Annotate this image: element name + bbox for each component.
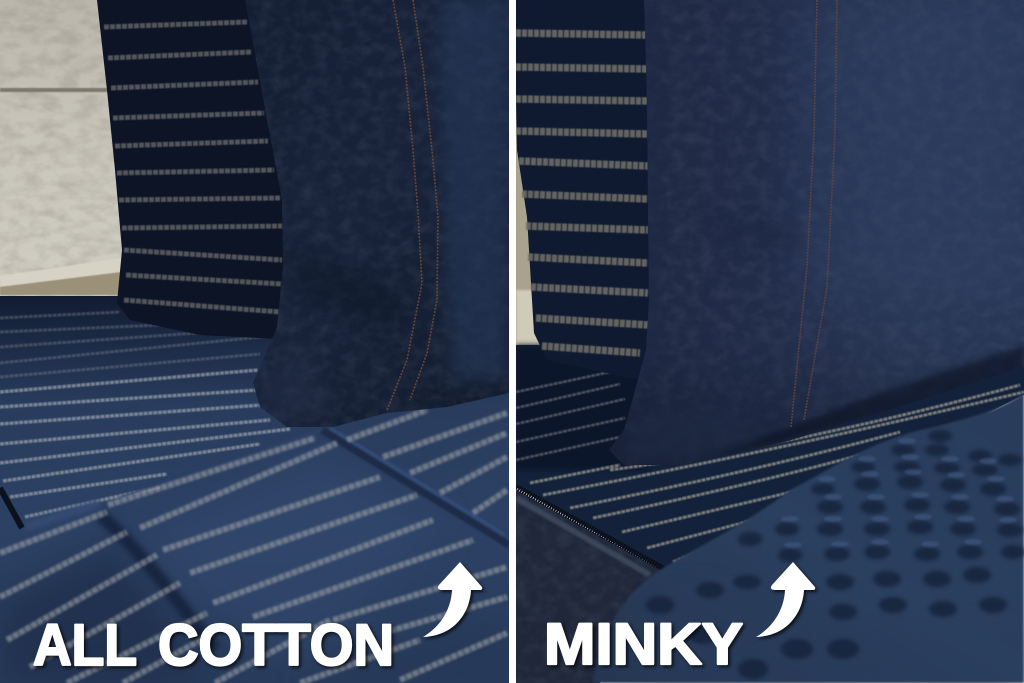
sheet stripes: faint bbox=[516, 372, 625, 460]
upper sheet stripes: faint bbox=[0, 312, 270, 377]
label: all cotton bbox=[33, 622, 396, 670]
zipper bbox=[516, 487, 664, 569]
quilt pad seams bbox=[25, 428, 509, 650]
label: all cotton: COTTON bbox=[158, 613, 394, 678]
backdrop bbox=[516, 102, 540, 345]
pillow seams bbox=[791, 0, 837, 427]
striped pillow bbox=[97, 0, 300, 340]
arrow: minky bbox=[756, 562, 815, 637]
sheet stripes: bright bbox=[530, 385, 1024, 562]
minky dimples bbox=[646, 430, 1024, 679]
arrow: cotton bbox=[423, 562, 482, 637]
minky blanket bbox=[593, 393, 1024, 683]
wall bbox=[0, 0, 130, 300]
sheet: cotton comforter bbox=[0, 296, 509, 683]
label: all cotton: ALL bbox=[33, 613, 137, 678]
denim pillow bbox=[600, 0, 1024, 470]
minky highlights bbox=[781, 438, 1017, 548]
upper sheet stripes: bright bbox=[0, 370, 290, 517]
panel: all cotton bbox=[0, 0, 509, 683]
striped pillow bbox=[516, 0, 660, 380]
zipper edge bbox=[0, 488, 22, 528]
pillow seams bbox=[387, 0, 438, 410]
upper-left dark corner bbox=[516, 345, 650, 470]
panel: minky bbox=[516, 0, 1024, 683]
dark sheet bbox=[516, 345, 1024, 572]
puffy stripes bbox=[0, 410, 507, 683]
denim pillow bbox=[245, 0, 509, 427]
denim mattress bbox=[516, 490, 665, 683]
label: minky: MINKY bbox=[544, 612, 743, 677]
